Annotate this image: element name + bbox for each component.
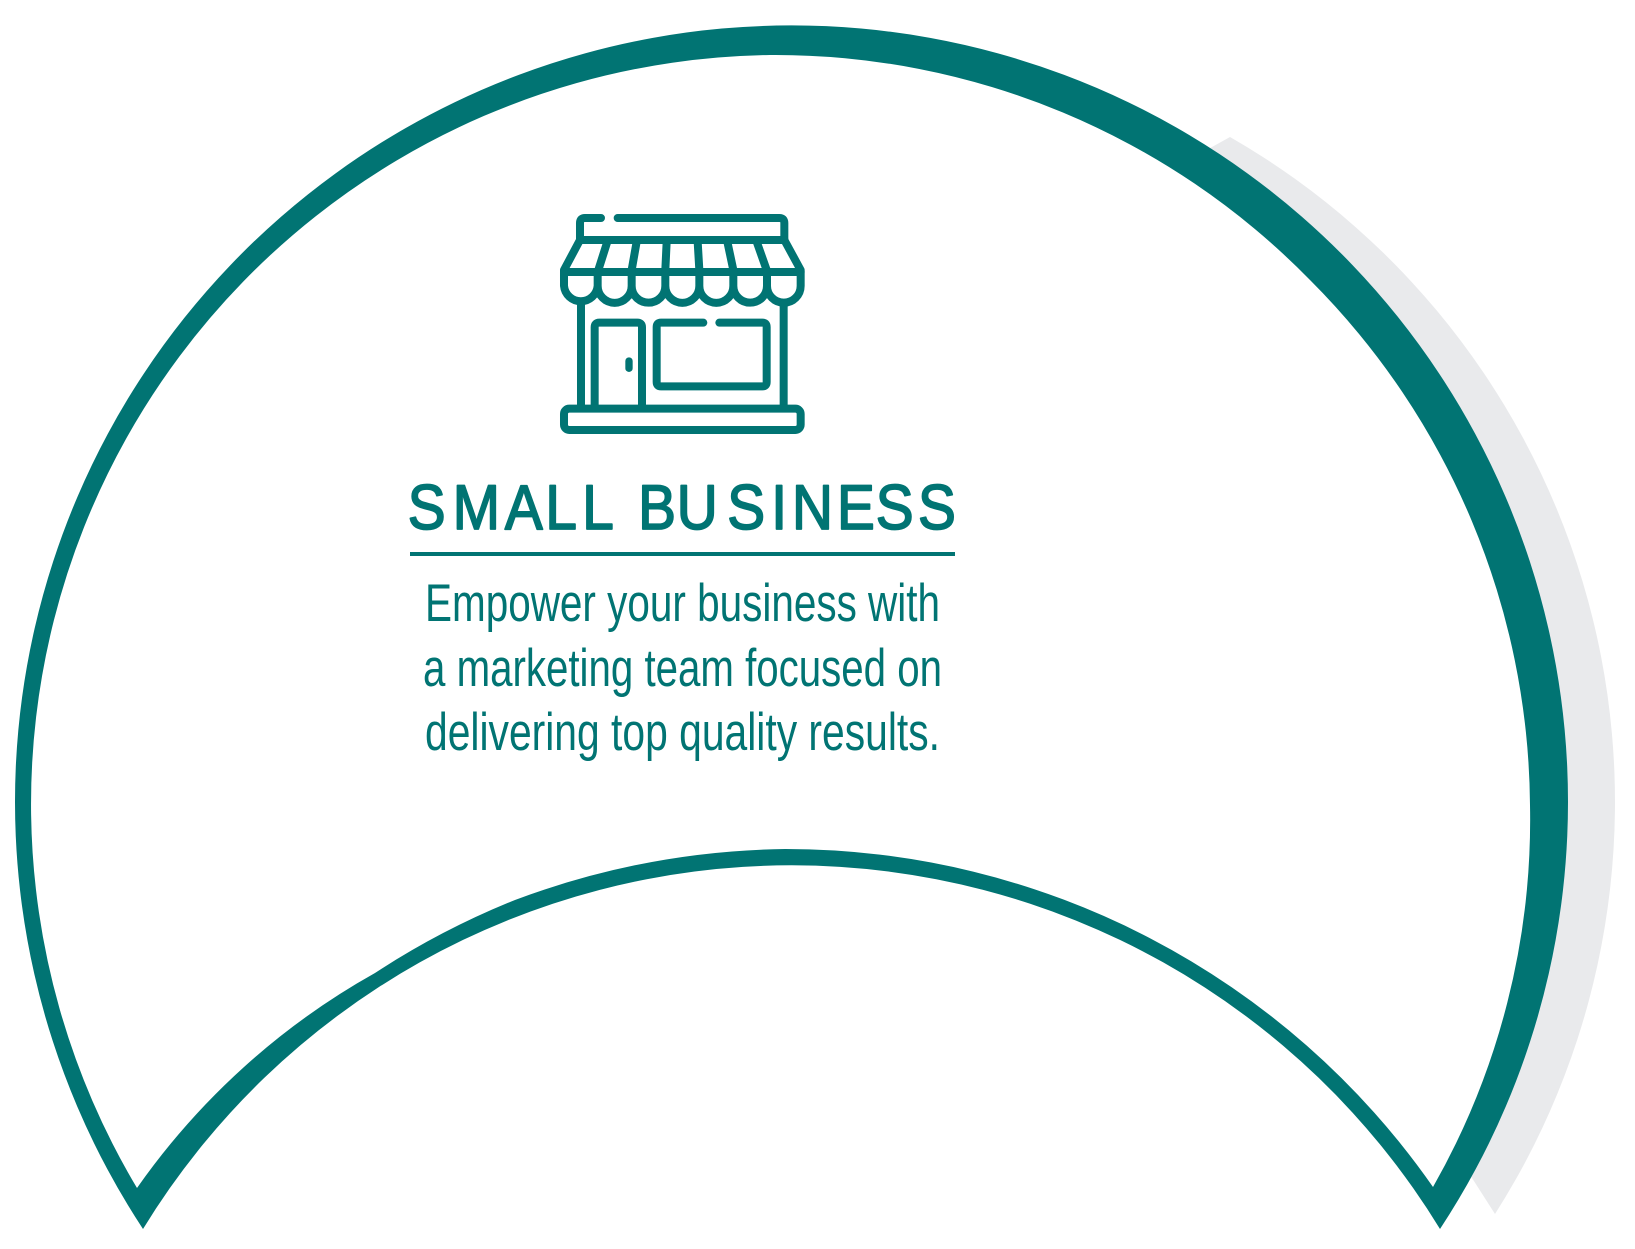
description text: a marketing team focused on (423, 639, 942, 698)
grey shadow crescent (1100, 137, 1615, 1214)
heading: small business: SMALL BUSINESS (408, 472, 956, 543)
description text (423, 574, 942, 762)
description text: delivering top quality results. (425, 703, 940, 762)
heading underline (410, 552, 955, 556)
icon: storefront (564, 218, 801, 430)
description text: Empower your business with (425, 574, 940, 633)
